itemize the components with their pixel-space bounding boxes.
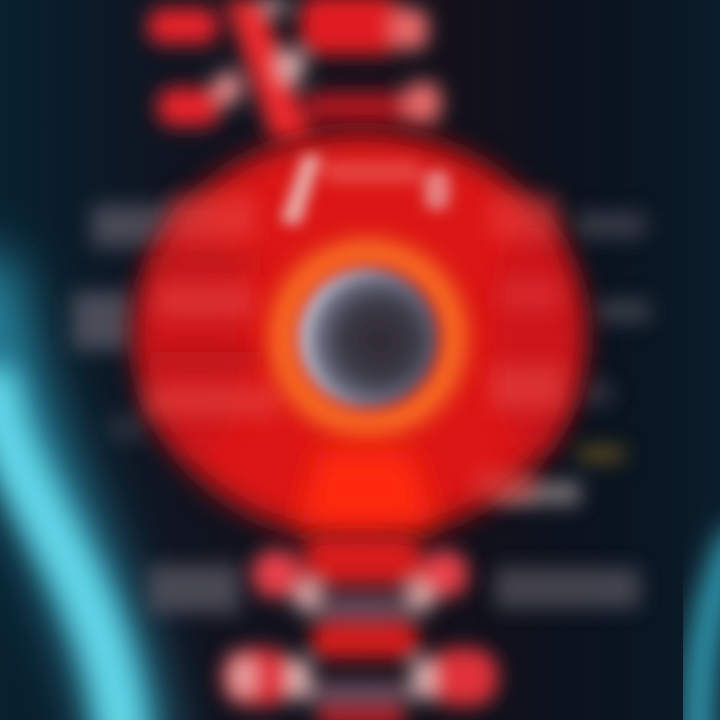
upper spine vertebrae bbox=[148, 0, 441, 140]
lower bright orange-red vertebra bbox=[298, 450, 435, 525]
orange glow ring around core bbox=[282, 252, 454, 424]
grey label text: left column bbox=[72, 205, 240, 613]
cyan pelvis bone: right bbox=[698, 540, 720, 720]
central red disc bbox=[136, 132, 584, 538]
cyan pelvis bone: left bbox=[0, 390, 122, 720]
disc banding bbox=[145, 195, 565, 500]
dark core sphere bbox=[298, 268, 438, 408]
cyan pelvis glow: left bbox=[0, 290, 130, 720]
grey label text: right column bbox=[495, 212, 649, 608]
disc upper vertebra with white ridges bbox=[280, 155, 450, 225]
lower spine vertebrae bbox=[222, 535, 498, 720]
